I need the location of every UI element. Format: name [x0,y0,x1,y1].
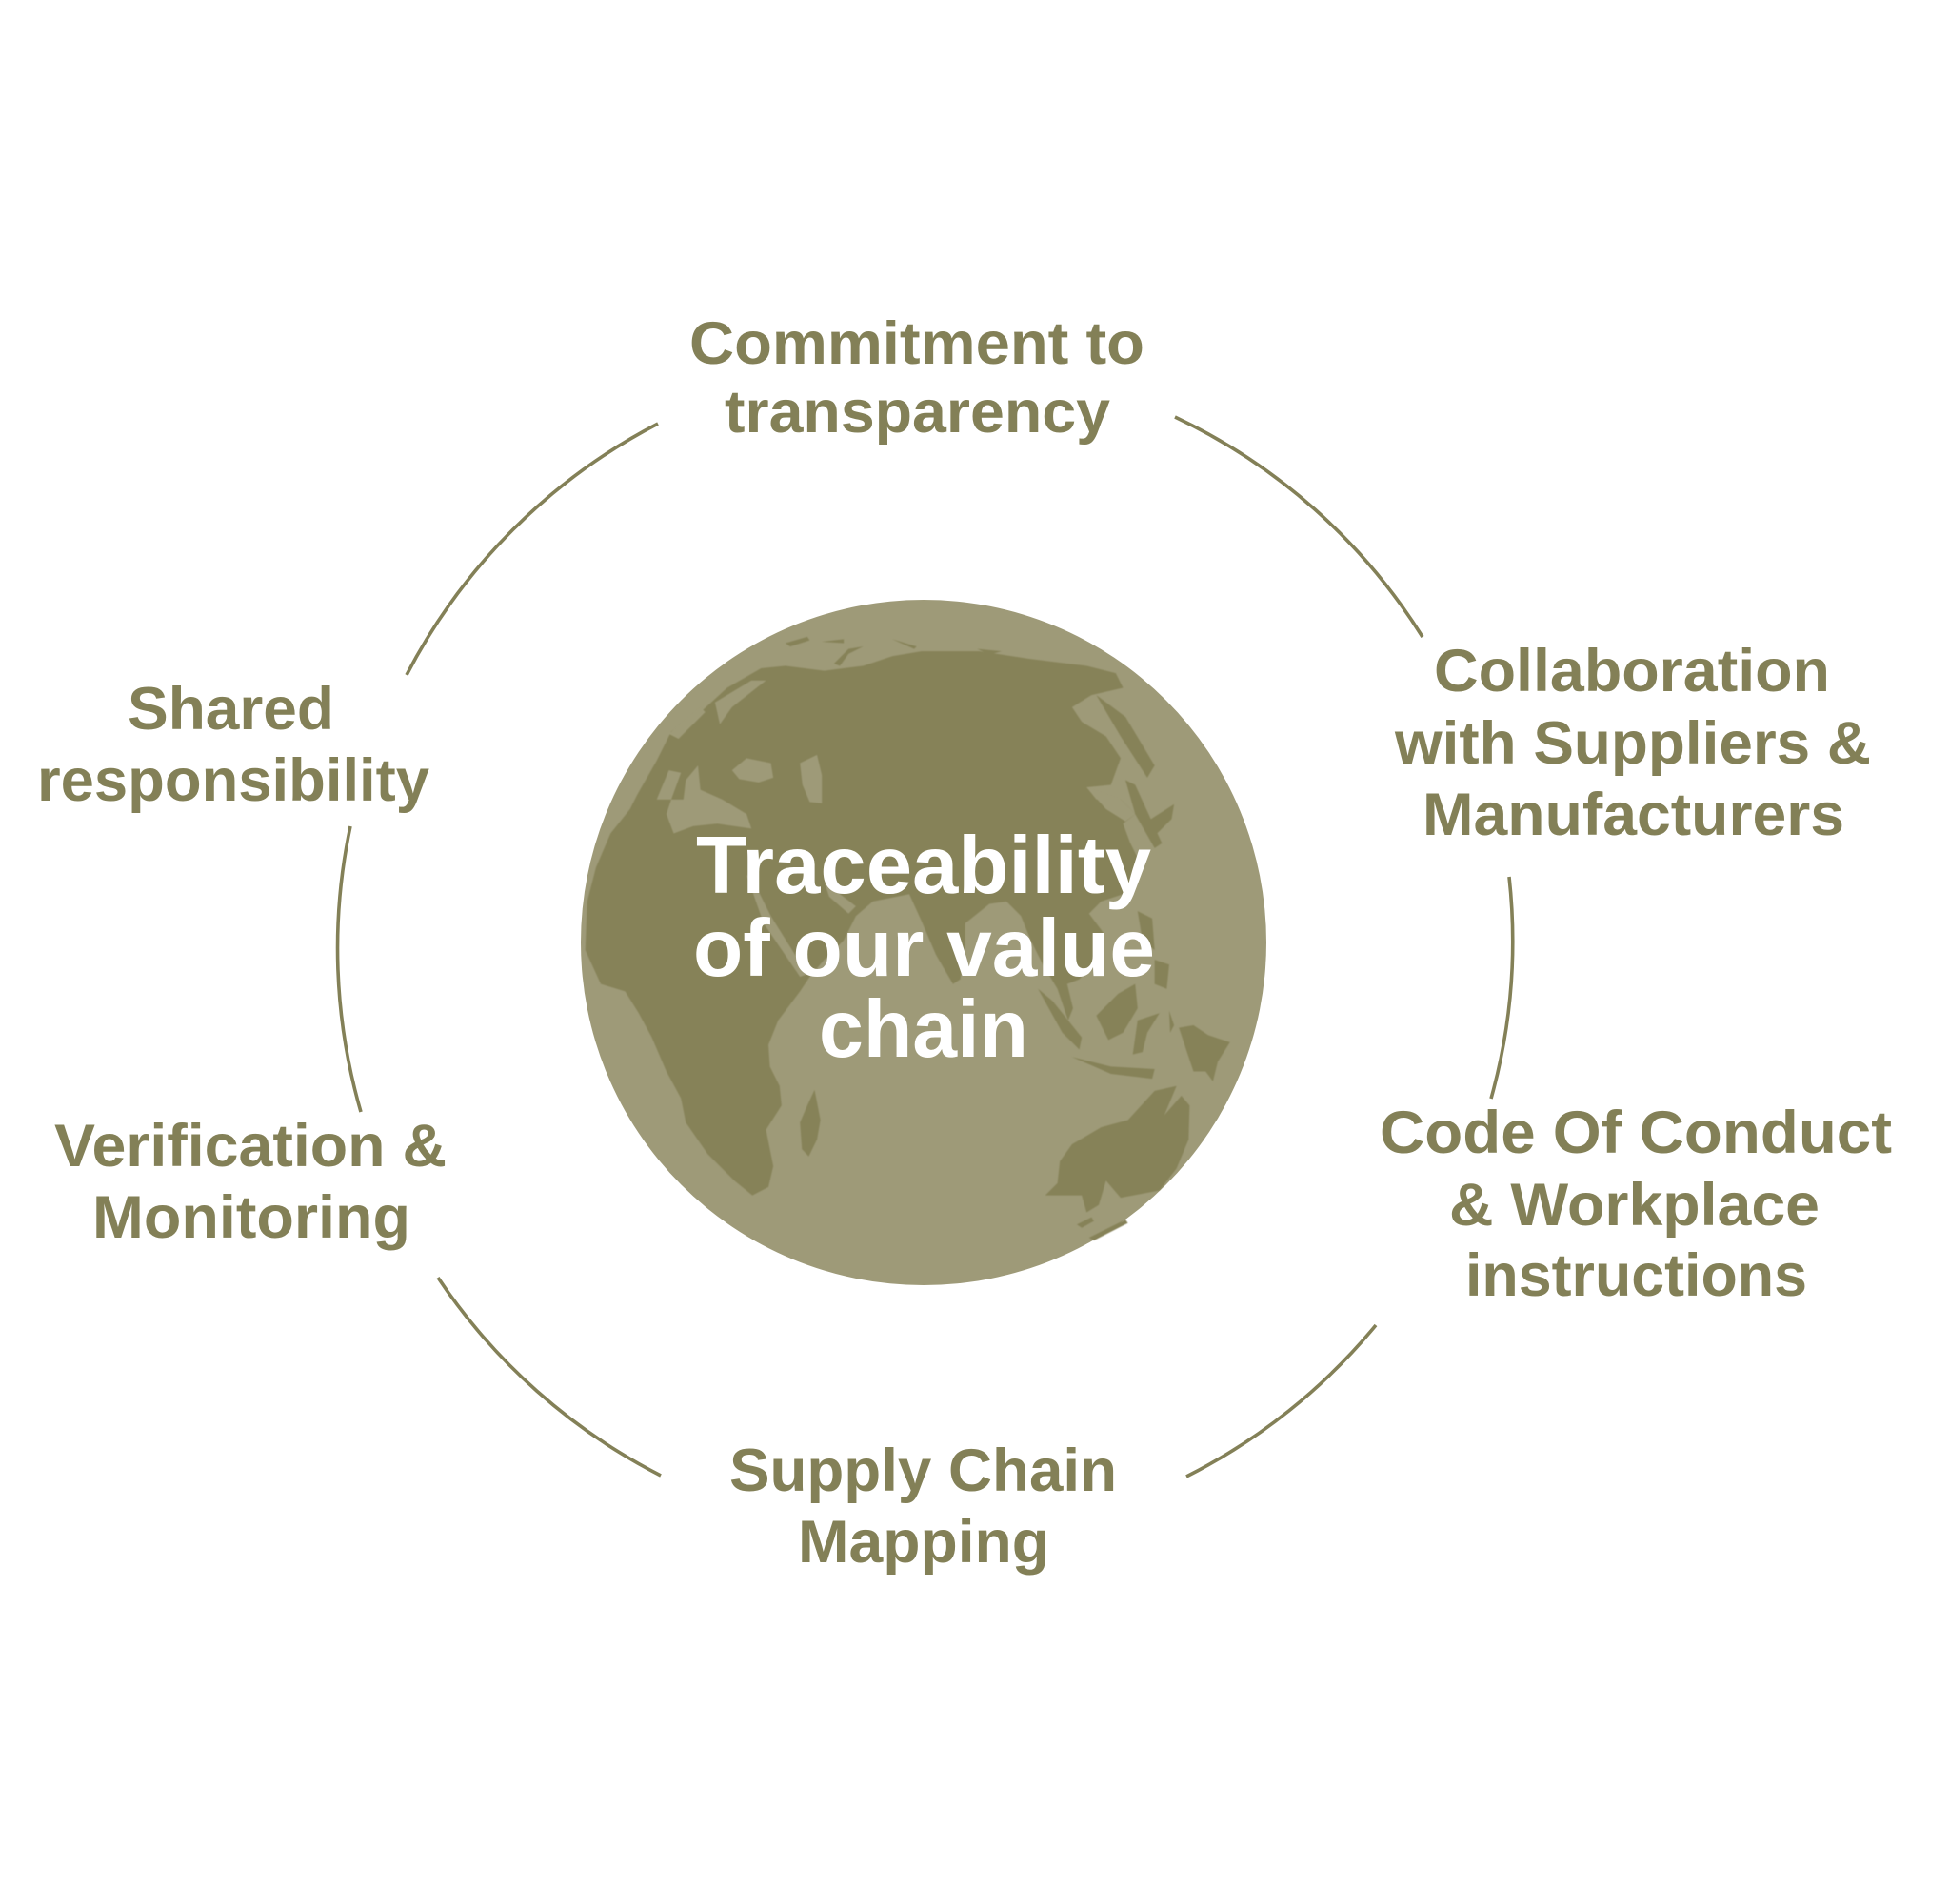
label: supply chain mapping: Supply Chain [729,1438,1117,1504]
label: supply chain mapping [729,1438,1117,1576]
Bay of Siberia [1086,787,1135,822]
label: collaboration with suppliers and manufacturers: Collaboration [1434,638,1830,704]
Mediterranean [667,765,751,834]
label: commitment to transparency: transparency [725,379,1110,446]
label: code of conduct and workplace instructions: & Workplace [1449,1172,1820,1239]
Borneo, Sulawesi [1096,984,1174,1055]
New Guinea [1179,1025,1230,1081]
center title [693,821,1155,1075]
Red Sea [746,875,807,977]
label: collaboration with suppliers and manufacturers: Manufacturers [1423,782,1844,848]
label: shared responsibility [37,676,429,814]
ring arcs [338,417,1513,1477]
label: code of conduct and workplace instructions [1380,1100,1892,1309]
arctic islands [786,637,1002,665]
center title: chain [819,984,1028,1075]
globe [581,600,1266,1285]
Sumatra and Java [1038,989,1155,1079]
label: collaboration with suppliers and manufacturers [1394,638,1871,848]
Black Sea [732,758,773,783]
label: verification and monitoring [54,1113,447,1251]
Caspian Sea [800,755,822,803]
label: code of conduct and workplace instructions: Code Of Conduct [1380,1100,1892,1166]
center title: of our value [693,903,1155,994]
label: shared responsibility: responsibility [37,747,429,814]
label: verification and monitoring: Verification & [54,1113,447,1180]
New Zealand [1077,1218,1128,1240]
Madagascar [800,1090,821,1157]
label: commitment to transparency [689,310,1144,446]
label: shared responsibility: Shared [128,676,334,743]
Baltic and northern seas [657,681,766,800]
label: commitment to transparency: Commitment to [689,310,1144,377]
label: verification and monitoring: Monitoring [92,1184,410,1251]
Australia [1045,1086,1189,1212]
Persian Gulf [825,883,856,914]
label: collaboration with suppliers and manufacturers: with Suppliers & [1394,710,1871,777]
label: supply chain mapping: Mapping [798,1509,1049,1576]
center title: Traceability [696,821,1151,911]
far east islands [1096,695,1174,989]
label: code of conduct and workplace instructions: instructions [1465,1242,1807,1309]
